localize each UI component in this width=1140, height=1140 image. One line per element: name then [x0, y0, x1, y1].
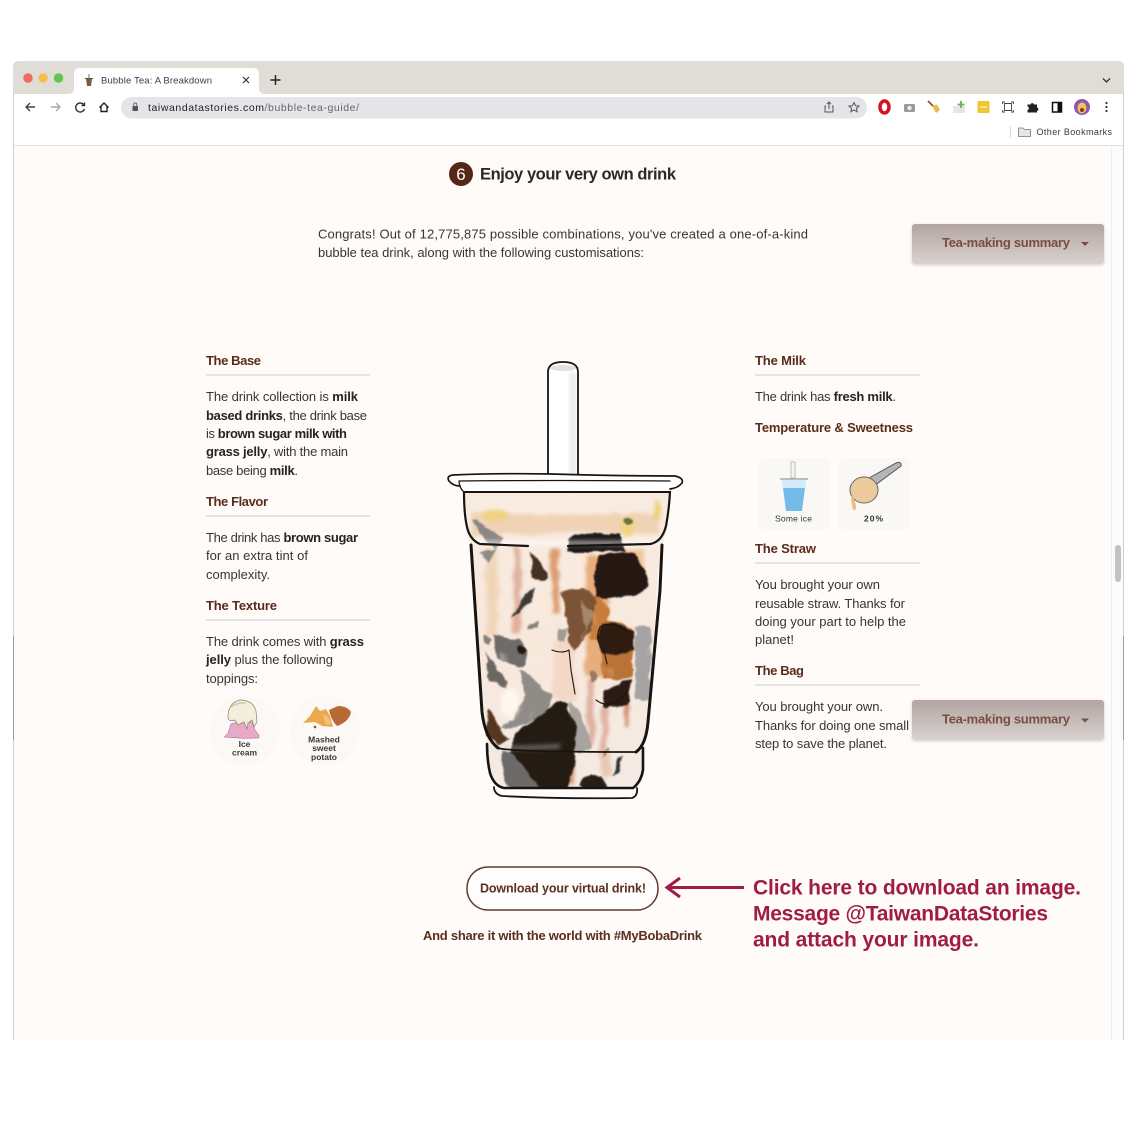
tile: some ice: Some ice: [775, 514, 812, 524]
topping: mashed sweet potato: Mashed: [308, 734, 340, 744]
icon: lock: [132, 103, 138, 111]
icon: reload: [76, 102, 84, 112]
block: the texture: toppings:: [206, 671, 258, 686]
block: the milk: The Milk: [755, 353, 807, 368]
callout: [753, 876, 1081, 952]
block: the flavor: for an extra tint of: [206, 548, 308, 563]
icon: star: [849, 102, 859, 112]
icon: folder: [1018, 128, 1030, 136]
bottom ring: [494, 787, 637, 798]
icon: plus note: [953, 101, 965, 113]
browser tab: Bubble Tea: A Breakdown: [101, 76, 212, 86]
block: the bag: [755, 663, 920, 751]
button: tea-making summary bottom: [912, 700, 1104, 740]
block: the base: The drink collection is milk: [206, 389, 359, 404]
illustration: bubble tea cup: [448, 362, 682, 800]
white highlights: [472, 543, 660, 748]
bookmarks bar: Other Bookmarks: [1036, 127, 1112, 137]
window control dots: [23, 73, 63, 83]
solid black blobs: [511, 533, 648, 793]
icon: yellow tag: [978, 101, 990, 113]
block: the base: base being milk.: [206, 463, 298, 478]
step number badge: [449, 162, 473, 186]
callout: Message @TaiwanDataStories: [753, 902, 1048, 926]
block: the bag: You brought your own.: [755, 699, 883, 714]
cup body: [471, 545, 662, 752]
block: the straw: doing your part to help the: [755, 614, 906, 629]
block: the milk: [755, 353, 920, 404]
button: download virtual drink: [467, 867, 658, 910]
intro text: Congrats! Out of 12,775,875 possible combinations, you've created a one-of-a-kind: [318, 226, 808, 242]
icon: home: [100, 103, 108, 112]
panel: left column: [205, 353, 370, 766]
topping: ice cream: Ice: [239, 739, 251, 749]
callout: and attach your image.: [753, 928, 979, 952]
button: tea-making summary bottom: Tea-making summary: [942, 712, 1071, 726]
toolbar: [13, 94, 1124, 145]
block: the bag: step to save the planet.: [755, 736, 887, 751]
straw: [548, 362, 578, 502]
icon: new tab: [270, 75, 280, 85]
address bar: [121, 97, 867, 118]
tile: twenty percent sugar: 20%: [864, 514, 883, 524]
icon: puzzle: [1028, 103, 1038, 112]
block: the base: grass jelly, with the main: [206, 444, 348, 459]
block: the milk: The drink has fresh milk.: [755, 389, 896, 404]
cup outline: [448, 474, 682, 798]
block: the base: based drinks, the drink base: [206, 408, 367, 423]
tile: some ice: [758, 458, 830, 530]
icon: menu: [1105, 102, 1108, 112]
block: temperature and sweetness: [755, 420, 913, 530]
icon: close tab: [243, 77, 249, 83]
block: the flavor: The Flavor: [206, 494, 268, 509]
button: tea-making summary top: Tea-making summary: [942, 235, 1071, 250]
drink watercolor: [465, 493, 669, 787]
section heading: [449, 162, 677, 186]
block: the flavor: The drink has brown sugar: [206, 530, 358, 545]
block: the base: [206, 353, 370, 478]
block: the base: is brown sugar milk with: [206, 426, 347, 441]
icon: broom: [928, 101, 940, 113]
icon: forward: [51, 103, 60, 111]
upper foam strokes: [482, 498, 659, 537]
section heading: Enjoy your very own drink: [480, 166, 677, 184]
button: download virtual drink: Download your virtual drink!: [480, 882, 646, 896]
callout: Click here to download an image.: [753, 876, 1081, 900]
icon: ice cream: [224, 700, 259, 738]
block: the bag: The Bag: [755, 663, 804, 678]
topping: mashed sweet potato: sweet: [312, 743, 336, 753]
tile: twenty percent sugar: [838, 458, 910, 530]
block: the flavor: [206, 494, 370, 582]
block: the base: The Base: [206, 353, 261, 368]
icon: opera: [880, 101, 889, 113]
block: the straw: reusable straw. Thanks for: [755, 596, 906, 611]
icon: tab favicon: [85, 74, 93, 86]
button: tea-making summary top: [912, 224, 1104, 264]
page background: [13, 146, 1124, 1040]
brown and orange blobs: [474, 517, 651, 790]
icon: back: [26, 103, 35, 111]
block: the texture: [205, 598, 370, 686]
topping: ice cream: [210, 696, 280, 766]
icon: side panel: [1052, 102, 1062, 112]
navigation icons: [26, 102, 108, 112]
block: the flavor: complexity.: [206, 567, 270, 582]
icon: capture: [1002, 102, 1014, 112]
extension icons: [880, 99, 1108, 115]
icon: tab list chevron: [1103, 78, 1110, 82]
topping: mashed sweet potato: potato: [311, 752, 337, 762]
topping: ice cream: cream: [232, 748, 257, 758]
intro text: [318, 226, 808, 260]
intro text: bubble tea drink, along with the following customisations:: [318, 245, 644, 260]
block: the straw: You brought your own: [755, 577, 880, 592]
tab strip: [13, 61, 1124, 94]
icon: sugar spoon: [850, 462, 901, 510]
icon: iced drink: [780, 462, 808, 511]
block: the straw: The Straw: [755, 541, 817, 556]
share caption: And share it with the world with #MyBobaDrink: [423, 928, 703, 943]
browser tab: [68, 68, 265, 94]
block: the straw: [755, 541, 920, 647]
cup base: [487, 744, 643, 788]
inner sketch lines: [552, 624, 628, 704]
url: taiwandatastories.com/bubble-tea-guide/: [148, 102, 359, 114]
pale stripes: [470, 514, 660, 785]
panel: right column: [755, 353, 920, 751]
bookmarks bar: [1010, 126, 1112, 138]
block: the texture: jelly plus the following: [205, 652, 333, 667]
rim section: [464, 492, 670, 546]
icon: share: [825, 102, 833, 112]
lid: [448, 474, 682, 492]
icon: camera: [904, 104, 915, 112]
topping: mashed sweet potato: [290, 696, 360, 766]
block: the bag: Thanks for doing one small: [755, 718, 909, 733]
step number badge: 6: [456, 165, 466, 184]
icon: sweet potato: [303, 706, 351, 728]
arrow: [667, 878, 744, 897]
block: the texture: The Texture: [206, 598, 277, 613]
block: the straw: planet!: [755, 632, 794, 647]
icon: avatar: [1074, 99, 1090, 115]
scrollbar: [1111, 146, 1123, 1040]
block: the texture: The drink comes with grass: [206, 634, 364, 649]
block: temperature and sweetness: Temperature & Sweetness: [755, 420, 913, 435]
